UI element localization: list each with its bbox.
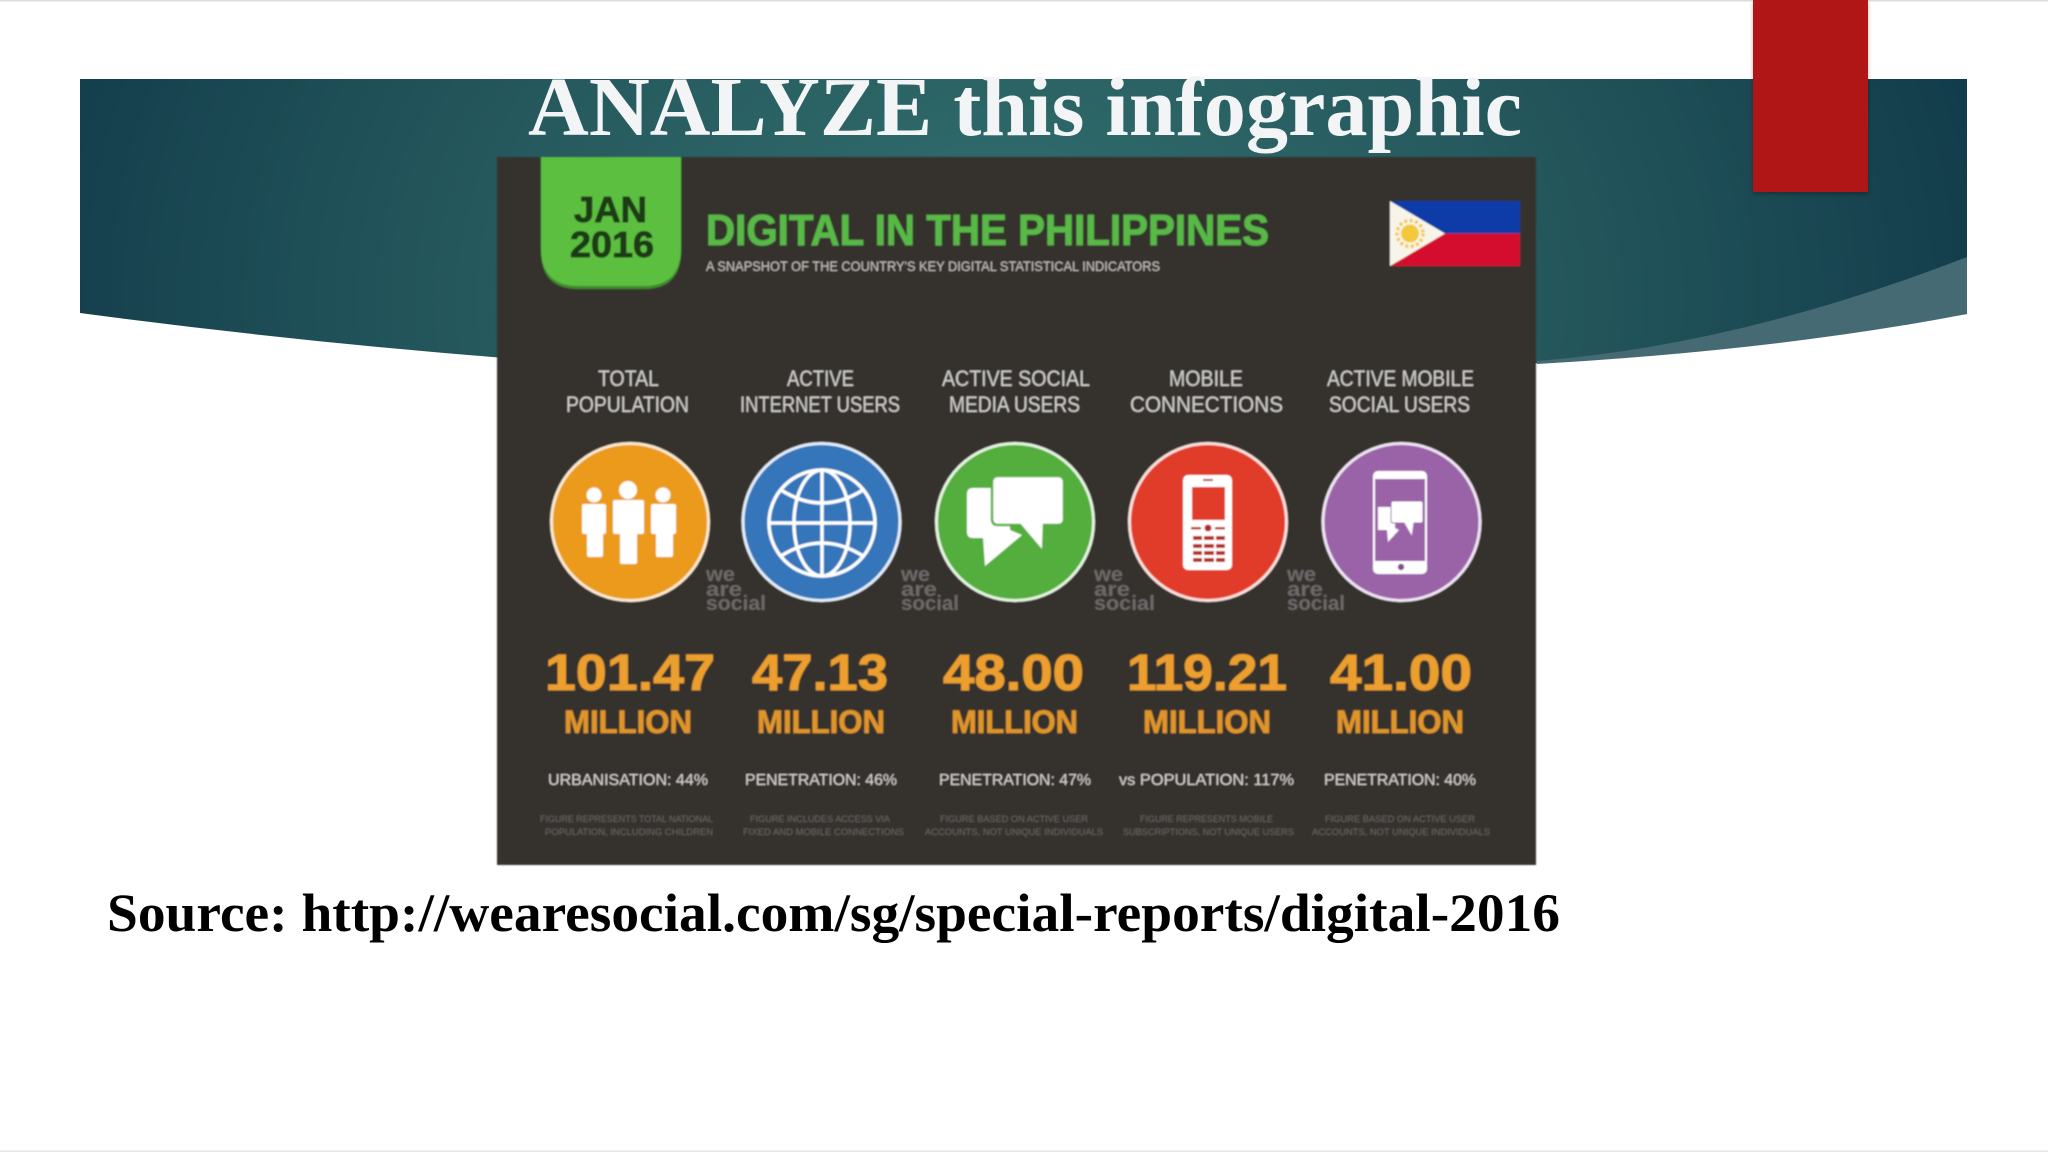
statistic numbers: 119.21: [1127, 644, 1287, 701]
column labels: MOBILE: [1169, 366, 1243, 391]
MILLION units: MILLION: [1336, 704, 1464, 740]
MILLION units: MILLION: [1143, 704, 1271, 740]
MILLION units: MILLION: [951, 704, 1078, 740]
icon: smartphone with bubbles: [1323, 444, 1480, 600]
statistic numbers: 41.00: [1330, 644, 1472, 701]
column labels: INTERNET USERS: [740, 392, 900, 417]
we are social watermarks: [705, 564, 1345, 615]
penetration figures: URBANISATION: 44%: [548, 772, 708, 789]
we are social watermarks: are: [706, 579, 742, 601]
we are social watermarks: we: [705, 564, 735, 586]
column labels: MEDIA USERS: [949, 392, 1080, 417]
date tab: 2016: [570, 224, 654, 265]
panel subheading: A SNAPSHOT OF THE COUNTRY'S KEY DIGITAL STATISTICAL INDICATORS: [706, 258, 1160, 274]
we are social watermarks: social: [706, 593, 766, 615]
column labels: [566, 366, 1474, 417]
footnotes: FIGURE BASED ON ACTIVE USER: [1325, 814, 1475, 825]
penetration figures: PENETRATION: 47%: [939, 772, 1091, 789]
footnotes: FIGURE REPRESENTS MOBILE: [1140, 814, 1273, 825]
footnotes: ACCOUNTS, NOT UNIQUE INDIVIDUALS: [925, 827, 1103, 838]
panel: digital in the Philippines: [497, 157, 1536, 865]
penetration figures: [548, 772, 1476, 789]
icon: people: [552, 444, 708, 600]
red bookmark tab: [1753, 0, 1868, 192]
footnotes: FIXED AND MOBILE CONNECTIONS: [743, 827, 904, 838]
we are social watermarks: are: [901, 579, 937, 601]
we are social watermarks: are: [1287, 579, 1323, 601]
footnotes: ACCOUNTS, NOT UNIQUE INDIVIDUALS: [1312, 827, 1490, 838]
footnotes: POPULATION, INCLUDING CHILDREN: [545, 827, 713, 838]
penetration figures: PENETRATION: 46%: [745, 772, 897, 789]
MILLION units: [564, 704, 1464, 740]
we are social watermarks: social: [1287, 593, 1345, 615]
we are social watermarks: social: [901, 593, 959, 615]
column labels: ACTIVE: [787, 366, 854, 391]
we are social watermarks: social: [1094, 593, 1155, 615]
column labels: ACTIVE MOBILE: [1327, 366, 1474, 391]
footnotes: SUBSCRIPTIONS, NOT UNIQUE USERS: [1123, 827, 1294, 838]
MILLION units: MILLION: [757, 704, 885, 740]
penetration figures: PENETRATION: 40%: [1324, 772, 1476, 789]
statistic numbers: 101.47: [545, 644, 715, 701]
icon: globe: [743, 444, 900, 600]
column labels: SOCIAL USERS: [1329, 392, 1470, 417]
source line: Source: http://wearesocial.com/sg/special-reports/digital-2016: [107, 883, 1560, 943]
icon: Philippine flag: [1390, 201, 1520, 266]
footnotes: FIGURE REPRESENTS TOTAL NATIONAL: [540, 814, 713, 825]
column labels: CONNECTIONS: [1130, 392, 1283, 417]
column labels: ACTIVE SOCIAL: [942, 366, 1090, 391]
column labels: POPULATION: [566, 392, 689, 417]
column labels: TOTAL: [598, 366, 659, 391]
penetration figures: vs POPULATION: 117%: [1119, 772, 1294, 789]
title: ANALYZE this infographic: [528, 61, 1522, 154]
icon: mobile phone: [1130, 444, 1286, 600]
panel heading: DIGITAL IN THE PHILIPPINES: [706, 206, 1269, 255]
statistic numbers: 48.00: [943, 644, 1084, 701]
we are social watermarks: we: [900, 564, 930, 586]
header banner: [80, 79, 1967, 381]
date tab: [541, 157, 681, 289]
footnotes: FIGURE INCLUDES ACCESS VIA: [750, 814, 891, 825]
we are social watermarks: we: [1093, 564, 1123, 586]
footnotes: [540, 814, 1490, 838]
statistic numbers: [545, 644, 1472, 701]
we are social watermarks: we: [1286, 564, 1316, 586]
MILLION units: MILLION: [564, 704, 692, 740]
icon: speech bubbles: [936, 444, 1094, 600]
footnotes: FIGURE BASED ON ACTIVE USER: [940, 814, 1088, 825]
we are social watermarks: are: [1094, 579, 1130, 601]
date tab: JAN: [574, 189, 647, 230]
statistic numbers: 47.13: [752, 644, 888, 701]
